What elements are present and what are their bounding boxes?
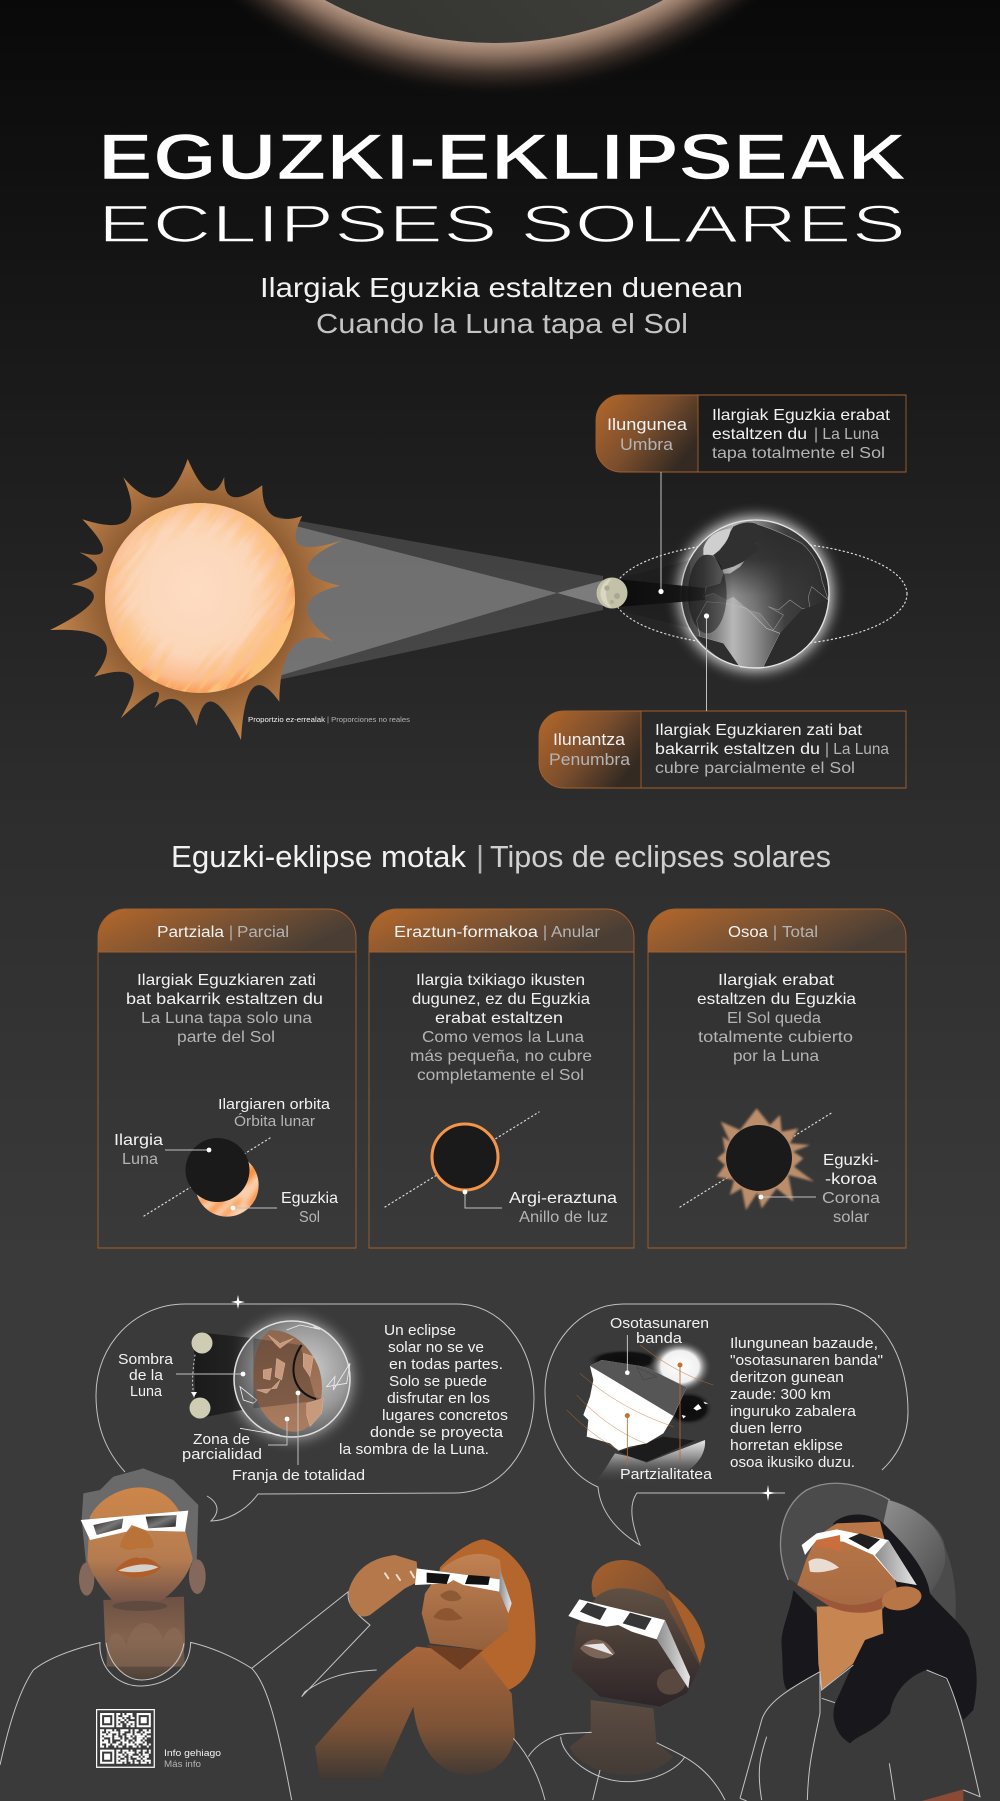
illustration: woman with hat — [740, 1483, 980, 1801]
heading: eclipse types: | — [476, 839, 484, 874]
speech bubble: totality band: Ilungunean bazaude, — [730, 1336, 878, 1352]
speech bubble: totality band — [545, 1304, 908, 1545]
diagram: light cones from sun to moon — [245, 512, 604, 686]
panel: partial eclipse: La Luna tapa solo una — [141, 1010, 312, 1027]
panel: partial eclipse — [98, 909, 356, 1248]
callout: penumbra: Ilargiak Eguzkiaren zati bat — [655, 722, 863, 739]
note: proportions — [248, 715, 410, 724]
callout: umbra — [596, 395, 906, 472]
panel: total eclipse: | — [773, 924, 777, 941]
speech bubble: where the eclipse is seen: de la — [129, 1368, 164, 1384]
panel: partial eclipse: Luna — [122, 1151, 158, 1168]
panel: total eclipse: por la Luna — [733, 1048, 819, 1065]
callout: umbra: Ilungunea — [607, 416, 688, 434]
callout: penumbra — [539, 711, 906, 788]
panel: total eclipse: Ilargiak erabat — [718, 972, 835, 989]
panel: total eclipse — [648, 909, 906, 1248]
callout: penumbra: Penumbra — [549, 751, 631, 769]
panel: annular eclipse: | — [543, 924, 547, 941]
callout: penumbra: cubre parcialmente el Sol — [655, 760, 855, 777]
panel: total eclipse: estaltzen du Eguzkia — [697, 991, 856, 1008]
subtitle: Cuando la Luna tapa el Sol — [316, 308, 688, 339]
panel: total eclipse: Corona — [822, 1190, 880, 1207]
speech bubble: where the eclipse is seen: Un eclipse — [384, 1323, 456, 1339]
speech bubble: where the eclipse is seen — [96, 1295, 534, 1521]
speech bubble: totality band: duen lerro — [730, 1421, 802, 1437]
illustration: woman with headscarf — [315, 1539, 536, 1780]
panel: annular eclipse: dugunez, ez du Eguzkia — [412, 991, 590, 1008]
heading: eclipse types — [171, 839, 831, 874]
speech bubble: where the eclipse is seen: Luna — [130, 1384, 163, 1400]
panel: annular eclipse: Como vemos la Luna — [422, 1029, 584, 1046]
speech bubble: where the eclipse is seen: Zona de — [193, 1432, 250, 1448]
panel: total eclipse: totalmente cubierto — [698, 1029, 853, 1046]
panel: annular eclipse: completamente el Sol — [417, 1067, 584, 1084]
panel: annular eclipse: más pequeña, no cubre — [410, 1048, 592, 1065]
panel: partial eclipse: bat bakarrik estaltzen du — [126, 991, 323, 1008]
panel: annular eclipse: Argi-eraztuna — [509, 1190, 617, 1207]
pointer: umbra — [658, 472, 664, 594]
eclipse corona at top of page — [84, 0, 904, 99]
speech bubble: totality band: banda — [636, 1331, 683, 1347]
panel: total eclipse: Osoa — [728, 924, 768, 941]
callout: umbra: | La Luna — [814, 426, 879, 443]
callout: umbra: estaltzen du — [712, 426, 807, 443]
heading: eclipse types: Eguzki-eklipse motak — [171, 839, 466, 874]
pointer: penumbra — [704, 613, 709, 711]
callout: penumbra: | La Luna — [825, 741, 889, 758]
speech bubble: totality band: Partzialitatea — [620, 1467, 713, 1483]
speech bubble: where the eclipse is seen: la sombra de la Luna. — [339, 1442, 489, 1458]
panel: total eclipse: Eguzki- — [823, 1152, 879, 1169]
speech bubble: totality band: "osotasunaren banda" — [730, 1353, 883, 1369]
callout: umbra: Ilargiak Eguzkia erabat — [712, 407, 891, 424]
panel: total eclipse: El Sol queda — [727, 1010, 821, 1027]
icon: earth — [678, 517, 832, 671]
callout: penumbra: bakarrik estaltzen du — [655, 741, 820, 758]
panel: partial eclipse: Ilargiak Eguzkiaren zati — [137, 972, 316, 989]
illustration: person with cap — [513, 1560, 725, 1800]
subtitle: Ilargiak Eguzkia estaltzen duenean — [260, 272, 743, 303]
note: proportions: Proportzio ez-errealak — [248, 715, 325, 724]
more info label: Más info — [164, 1759, 201, 1770]
speech bubble: where the eclipse is seen: donde se proyecta — [370, 1425, 504, 1441]
title — [98, 120, 907, 254]
speech bubble: totality band: osoa ikusiko duzu. — [730, 1455, 855, 1471]
panel: annular eclipse: Ilargia txikiago ikusten — [416, 972, 585, 989]
panel: total eclipse: solar — [833, 1209, 870, 1226]
icon: sun with flares — [50, 459, 342, 740]
panel: partial eclipse: Sol — [299, 1209, 320, 1226]
subtitle — [260, 272, 743, 339]
speech bubble: where the eclipse is seen: solar no se ve — [388, 1340, 484, 1356]
panel: annular eclipse: Eraztun-formakoa — [394, 924, 538, 941]
speech bubble: totality band: Osotasunaren — [610, 1316, 709, 1332]
icon: moon — [596, 578, 628, 608]
title: EGUZKI-EKLIPSEAK — [98, 120, 907, 194]
panel: annular eclipse — [369, 909, 634, 1248]
illustration: man with eclipse glasses — [0, 1468, 377, 1800]
speech bubble: where the eclipse is seen: Franja de totalidad — [232, 1468, 365, 1484]
moon shadow: umbra and penumbra — [617, 560, 705, 628]
panel: annular eclipse: Anillo de luz — [519, 1209, 608, 1226]
QR code — [96, 1709, 155, 1768]
panel: total eclipse: Total — [782, 924, 818, 941]
speech bubble: totality band: deritzon gunean — [730, 1370, 844, 1386]
panel: partial eclipse: Partziala — [157, 924, 224, 941]
panel: partial eclipse: | — [229, 924, 233, 941]
title: ECLIPSES SOLARES — [98, 195, 906, 254]
panel: partial eclipse: Ilargiaren orbita — [218, 1096, 331, 1113]
note: proportions: | Proporciones no reales — [327, 715, 410, 724]
panel: partial eclipse: Eguzkia — [281, 1190, 338, 1207]
panel: total eclipse: -koroa — [825, 1171, 877, 1188]
callout: umbra: tapa totalmente el Sol — [712, 445, 885, 462]
callout: umbra: Umbra — [620, 436, 674, 454]
orbit of the moon — [613, 542, 907, 646]
speech bubble: where the eclipse is seen: parcialidad — [182, 1447, 262, 1463]
speech bubble: where the eclipse is seen: disfrutar en los — [387, 1391, 490, 1407]
callout: penumbra: Ilunantza — [553, 731, 626, 749]
speech bubble: totality band: horretan eklipse — [730, 1438, 843, 1454]
panel: annular eclipse: erabat estaltzen — [435, 1010, 563, 1027]
map: iberian peninsula with totality band — [567, 1335, 713, 1484]
panel: partial eclipse: Parcial — [237, 924, 289, 941]
speech bubble: where the eclipse is seen: en todas partes. — [389, 1357, 503, 1373]
speech bubble: where the eclipse is seen: Solo se puede — [389, 1374, 487, 1390]
speech bubble: totality band: inguruko zabalera — [730, 1404, 857, 1420]
heading: eclipse types: Tipos de eclipses solares — [490, 839, 831, 874]
panel: annular eclipse: Anular — [551, 924, 600, 941]
panel: partial eclipse: Órbita lunar — [234, 1113, 315, 1130]
more info label — [164, 1748, 221, 1770]
panel: partial eclipse: Ilargia — [114, 1132, 163, 1149]
speech bubble: totality band: zaude: 300 km — [730, 1387, 831, 1403]
panel: partial eclipse: parte del Sol — [177, 1029, 275, 1046]
speech bubble: where the eclipse is seen: Sombra — [118, 1352, 174, 1368]
icon: globe with moon shadow — [190, 1319, 352, 1439]
speech bubble: where the eclipse is seen: lugares concretos — [382, 1408, 508, 1424]
more info label: Info gehiago — [164, 1748, 221, 1759]
